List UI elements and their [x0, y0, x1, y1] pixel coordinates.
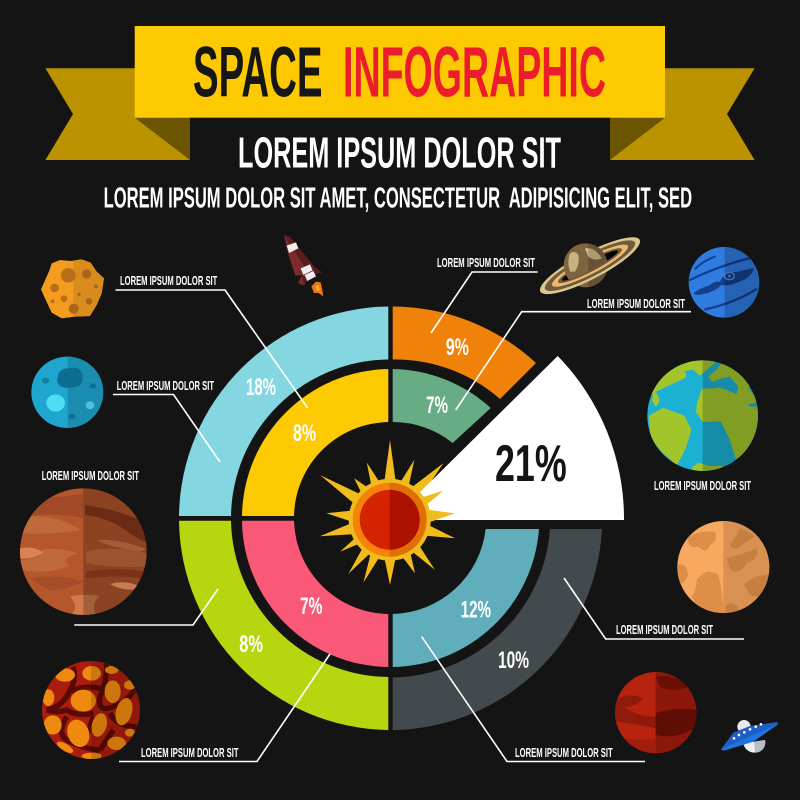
percentage labels	[239, 334, 567, 674]
sun rays behind white segment	[317, 440, 448, 585]
percentage labels: 7%	[300, 593, 323, 620]
callout: yellow segment, asteroid: LOREM IPSUM DOLOR SIT	[120, 273, 217, 288]
planet: neptune	[688, 247, 760, 318]
callout: dark segment, orange planet	[564, 578, 744, 639]
planet: blue moon	[31, 357, 103, 428]
segment: 8% yellow	[242, 369, 388, 516]
subtitle: LOREM IPSUM DOLOR SIT	[238, 128, 561, 178]
donut chart	[179, 306, 624, 730]
planet: lava	[42, 661, 140, 759]
callout: teal segment, red planet	[422, 637, 645, 762]
percentage labels: 7%	[426, 392, 448, 419]
segment: 10% dark grey	[393, 529, 602, 730]
segment: 9% orange	[393, 306, 536, 399]
segment: 18% light blue	[179, 306, 388, 516]
planet: red banded	[613, 670, 699, 755]
callout: green segment, neptune: LOREM IPSUM DOLOR SIT	[587, 296, 685, 311]
percentage labels: 8%	[239, 631, 263, 658]
segment: 7% pink	[242, 521, 388, 667]
percentage labels: 10%	[498, 647, 529, 674]
sun	[349, 479, 457, 561]
segment: 8% lime	[179, 521, 388, 730]
icon: rocket	[284, 235, 323, 296]
title banner	[45, 26, 755, 160]
callout: pink segment, lava planet	[119, 654, 330, 762]
segment: 7% green	[393, 369, 491, 443]
percentage labels: 8%	[293, 420, 316, 447]
percentage labels: 9%	[446, 334, 469, 361]
title banner: SPACE	[193, 34, 322, 112]
planet: brown banded	[17, 487, 150, 620]
callout: pink segment, lava planet: LOREM IPSUM DOLOR SIT	[141, 745, 239, 760]
planet: orange spotted	[677, 520, 772, 615]
planet: orange asteroid	[41, 259, 104, 318]
callout: teal segment, red planet: LOREM IPSUM DOLOR SIT	[515, 745, 613, 760]
label: brown planet: LOREM IPSUM DOLOR SIT	[42, 468, 139, 483]
percentage labels: 18%	[246, 374, 276, 401]
callout: orange segment, saturn: LOREM IPSUM DOLOR SIT	[437, 255, 535, 270]
callout: yellow segment, asteroid	[116, 273, 308, 408]
callout: dark segment, orange planet: LOREM IPSUM DOLOR SIT	[616, 622, 713, 637]
callout: lime segment	[74, 589, 218, 625]
callout: orange segment, saturn	[431, 255, 538, 333]
planet: earth	[647, 358, 763, 473]
segment: 12% teal	[393, 529, 539, 667]
planet: saturn	[540, 237, 640, 294]
percentage labels: 21%	[495, 435, 567, 493]
percentage labels: 12%	[461, 597, 491, 624]
callout: light blue segment, moon	[113, 378, 220, 462]
callout: green segment, neptune	[456, 296, 691, 410]
callout: light blue segment, moon: LOREM IPSUM DOLOR SIT	[117, 378, 214, 393]
segment: 21% white	[415, 356, 624, 520]
icon: ufo	[721, 720, 778, 753]
